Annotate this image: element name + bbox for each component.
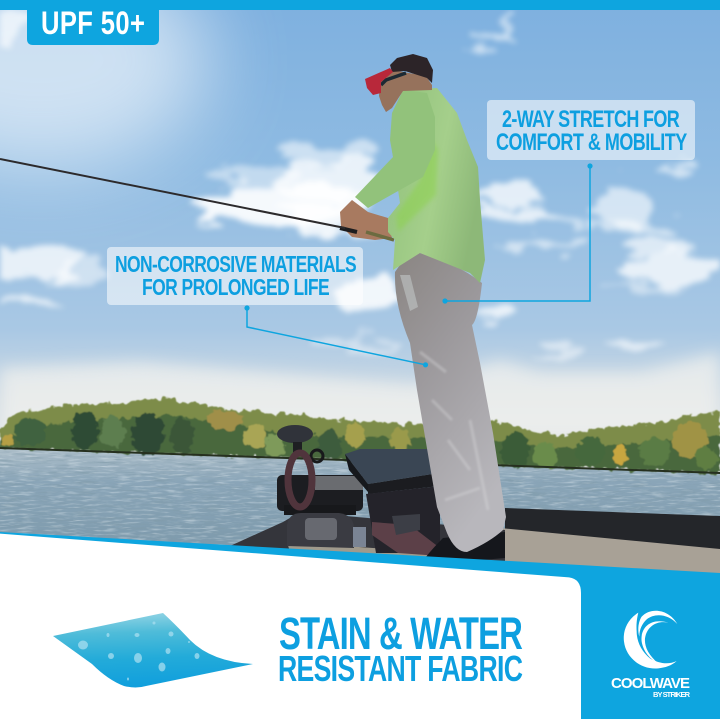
- icon: trousers: [395, 253, 506, 552]
- logo: Coolwave by Striker: [611, 611, 691, 699]
- callout: 2-way stretch: COMFORT & MOBILITY: [496, 130, 687, 156]
- fishing rod handle: [340, 228, 357, 232]
- top accent bar: [0, 0, 720, 10]
- sleeve: [355, 90, 435, 208]
- trolling motor: [277, 425, 323, 462]
- callout: non-corrosive materials: FOR PROLONGED LIFE: [142, 276, 330, 301]
- boat console and seat: [277, 475, 366, 548]
- cap visor: [365, 68, 393, 95]
- heading: stain and water resistant fabric: RESISTANT FABRIC: [278, 648, 523, 689]
- horizon haze: [0, 352, 720, 440]
- bright haze at upper left: [0, 0, 210, 170]
- callout: non-corrosive materials: NON-CORROSIVE MATERIALS: [115, 253, 357, 278]
- shirt body: [388, 88, 485, 283]
- heading: stain and water resistant fabric: STAIN & WATER: [279, 609, 523, 659]
- fish finder: [345, 449, 440, 556]
- boat hull edge and deck: [230, 508, 720, 575]
- badge: UPF 50+: [27, 0, 159, 45]
- logo: Coolwave by Striker: BY STRIKER: [653, 690, 691, 699]
- heading: stain and water resistant fabric: [278, 609, 523, 689]
- shoreline: [0, 447, 720, 474]
- hands: [340, 200, 392, 240]
- logo: Coolwave by Striker: COOLWAVE: [611, 675, 690, 692]
- water ripples: [0, 450, 720, 560]
- callout: 2-way stretch: [487, 100, 695, 160]
- angler: [340, 54, 506, 561]
- clouds: [0, 6, 720, 355]
- leader line: 2-way stretch: [442, 163, 593, 304]
- icon: crescent wave: [624, 611, 677, 668]
- photo masks: blue band and white panel: [0, 532, 720, 719]
- fishing rod: [0, 159, 345, 228]
- badge: UPF 50+: UPF 50+: [41, 6, 145, 42]
- callout: 2-way stretch: 2-WAY STRETCH FOR: [502, 107, 680, 133]
- sunglasses: [381, 73, 406, 85]
- shoes: [425, 532, 505, 561]
- callout: non-corrosive materials: [107, 247, 363, 305]
- face: [379, 70, 432, 112]
- sky background: [0, 0, 720, 470]
- water droplets: [78, 622, 200, 680]
- steering ring: [288, 453, 312, 507]
- cap crown: [390, 54, 433, 83]
- icon: fabric swatch with water droplets: [53, 613, 253, 688]
- leader line: non-corrosive materials: [244, 305, 428, 367]
- water: [0, 448, 720, 560]
- tree line: [0, 398, 720, 473]
